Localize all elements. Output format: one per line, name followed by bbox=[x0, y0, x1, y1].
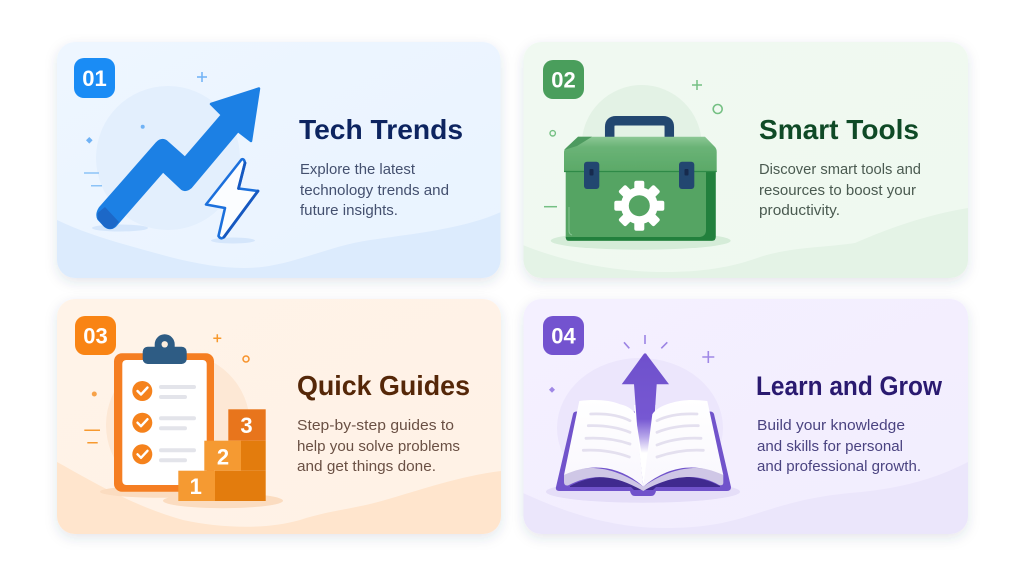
description: Build your knowledge bbox=[757, 417, 905, 434]
description: and get things done. bbox=[297, 458, 436, 475]
number badge 04 bbox=[543, 316, 584, 355]
title: Quick Guides: Quick Guides bbox=[297, 370, 470, 401]
icon: open book with upward arrow bbox=[546, 335, 740, 503]
icon: clipboard checklist with numbered steps bbox=[84, 334, 283, 508]
description: Discover smart tools and bbox=[759, 161, 921, 178]
icon: clipboard checklist with numbered steps: 1 bbox=[190, 474, 202, 499]
number badge 02: 02 bbox=[551, 68, 576, 92]
title: Smart Tools: Smart Tools bbox=[759, 114, 919, 145]
number badge 03: 03 bbox=[83, 324, 108, 348]
description: Step-by-step guides to bbox=[297, 417, 454, 434]
number badge 01: 01 bbox=[82, 66, 107, 91]
panel: Learn and Grow card bbox=[523, 299, 968, 536]
number badge 02 bbox=[543, 60, 584, 99]
icon: clipboard checklist with numbered steps: 3 bbox=[240, 413, 253, 438]
description: resources to boost your bbox=[759, 182, 916, 199]
panel: Tech Trends card bbox=[57, 42, 501, 280]
description: and professional growth. bbox=[757, 458, 921, 475]
description: and skills for personal bbox=[757, 438, 903, 455]
number badge 03 bbox=[75, 316, 116, 355]
panel: Smart Tools card bbox=[523, 42, 968, 280]
panel: Quick Guides card bbox=[57, 299, 501, 536]
number badge 04: 04 bbox=[551, 324, 576, 348]
title: Tech Trends: Tech Trends bbox=[299, 114, 463, 145]
description: Explore the latest bbox=[300, 161, 416, 178]
description: productivity. bbox=[759, 202, 840, 219]
description: future insights. bbox=[300, 202, 398, 219]
icon: green toolbox with gear bbox=[544, 80, 731, 250]
number badge 01 bbox=[74, 58, 115, 98]
title: Learn and Grow: Learn and Grow bbox=[756, 371, 943, 401]
description: technology trends and bbox=[300, 182, 449, 199]
icon: rising arrow with lightning bolt bbox=[84, 72, 259, 244]
icon: clipboard checklist with numbered steps: 2 bbox=[217, 444, 229, 470]
description: help you solve problems bbox=[297, 438, 460, 455]
